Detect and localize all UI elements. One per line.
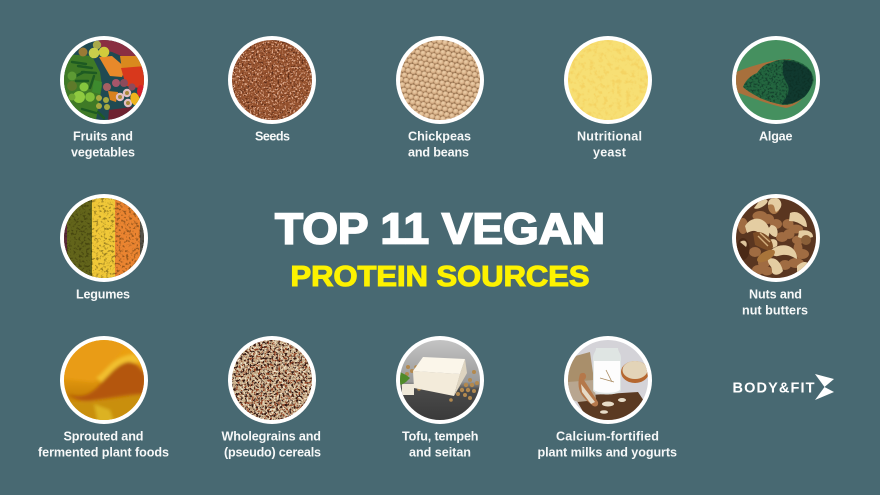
card: seeds: [228, 36, 316, 144]
card: nutritional yeast: [564, 36, 652, 160]
label: tofu, tempeh and seitan: Tofu, tempeh: [402, 430, 478, 444]
photo: chickpeas: [396, 36, 484, 124]
label: fruits and vegetables: Fruits and: [73, 130, 133, 144]
label: sprouted and fermented plant foods: fermented plant foods: [38, 446, 169, 460]
photo: algae: [732, 36, 820, 124]
card: algae: [732, 36, 820, 144]
logo: Body&Fit: [732, 374, 834, 400]
label: nuts and nut butters: nut butters: [742, 304, 808, 318]
label: calcium-fortified plant milks and yogurts: Calcium-fortified: [556, 430, 659, 444]
photo: nuts: [732, 194, 820, 282]
title: [275, 206, 605, 293]
card: calcium-fortified plant milks and yogurts: [538, 336, 677, 460]
subheading: protein sources: PROTEIN SOURCES: [290, 261, 590, 293]
label: chickpeas and beans: Chickpeas: [408, 130, 471, 144]
label: sprouted and fermented plant foods: [38, 430, 169, 460]
photo: legumes: [60, 194, 148, 282]
label: nutritional yeast: yeast: [593, 146, 627, 160]
card: fruits and vegetables: [60, 36, 148, 160]
logo mark: [815, 374, 834, 400]
photo: plant milk: [564, 336, 652, 424]
label: fruits and vegetables: vegetables: [71, 146, 135, 160]
label: sprouted and fermented plant foods: Sprouted and: [64, 430, 144, 444]
label: seeds: Seeds: [255, 130, 290, 144]
label: wholegrains and cereals: [222, 430, 321, 460]
label: fruits and vegetables: [71, 130, 135, 160]
photo: nutritional yeast: [564, 36, 652, 124]
card: wholegrains and cereals: [222, 336, 321, 460]
card: nuts and nut butters: [732, 194, 820, 318]
label: nutritional yeast: Nutritional: [577, 130, 642, 144]
label: nutritional yeast: [577, 130, 642, 160]
label: calcium-fortified plant milks and yogurts: [538, 430, 677, 460]
label: tofu, tempeh and seitan: [402, 430, 478, 460]
label: chickpeas and beans: [408, 130, 471, 160]
photo: quinoa grains: [228, 336, 316, 424]
label: calcium-fortified plant milks and yogurts: plant milks and yogurts: [538, 446, 677, 460]
photo: fruits and vegetables: [60, 36, 148, 124]
photo: sprouted foods: [60, 336, 148, 424]
label: legumes: Legumes: [76, 288, 130, 302]
heading: top 11 vegan: TOP 11 VEGAN: [275, 206, 605, 254]
label: nuts and nut butters: [742, 288, 808, 318]
label: nuts and nut butters: Nuts and: [749, 288, 802, 302]
logo wordmark: BODY&FIT: [732, 380, 815, 396]
card: tofu, tempeh and seitan: [396, 336, 484, 460]
card: chickpeas and beans: [396, 36, 484, 160]
photo: tofu: [396, 336, 484, 424]
label: algae: Algae: [759, 130, 792, 144]
label: chickpeas and beans: and beans: [408, 146, 469, 160]
label: wholegrains and cereals: (pseudo) cereals: [224, 446, 321, 460]
photo: seeds: [228, 36, 316, 124]
card: legumes: [60, 194, 148, 302]
label: tofu, tempeh and seitan: and seitan: [409, 446, 471, 460]
label: wholegrains and cereals: Wholegrains and: [222, 430, 321, 444]
card: sprouted and fermented plant foods: [38, 336, 169, 460]
